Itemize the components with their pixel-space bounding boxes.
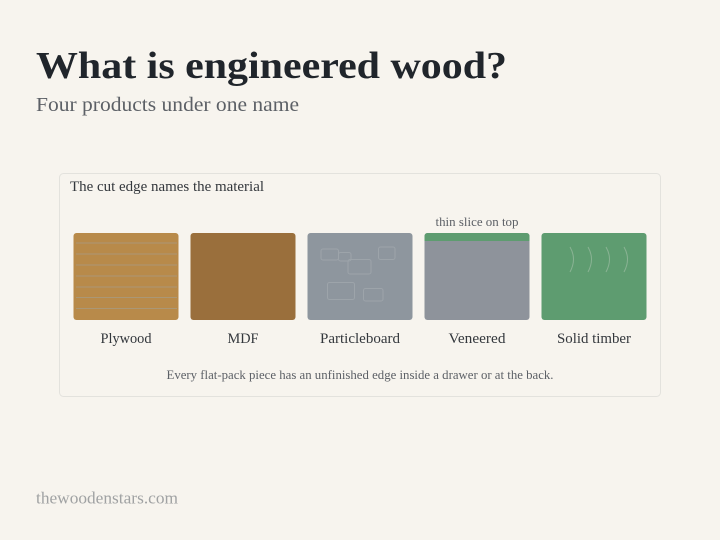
panel heading: The cut edge names the material (70, 179, 264, 195)
caption: Every flat-pack piece has an unfinished edge inside a drawer or at the back. (166, 367, 554, 382)
swatch: particleboard (308, 233, 412, 320)
swatch: veneered (424, 233, 530, 320)
label: solid timber: Solid timber (557, 331, 631, 347)
label: veneered: Veneered (448, 331, 506, 347)
annotation: thin slice on top: thin slice on top (436, 214, 518, 229)
label: MDF: MDF (228, 331, 258, 347)
swatch: MDF (190, 233, 296, 320)
panel: cut edge diagram (60, 174, 660, 396)
title: What is engineered wood? (36, 45, 507, 87)
label: particleboard: Particleboard (320, 331, 401, 347)
swatch: solid timber (542, 233, 646, 320)
footer source: thewoodenstars.com (36, 488, 178, 508)
swatch: plywood (74, 233, 178, 320)
label: plywood: Plywood (100, 331, 152, 347)
subtitle: Four products under one name (36, 94, 299, 116)
